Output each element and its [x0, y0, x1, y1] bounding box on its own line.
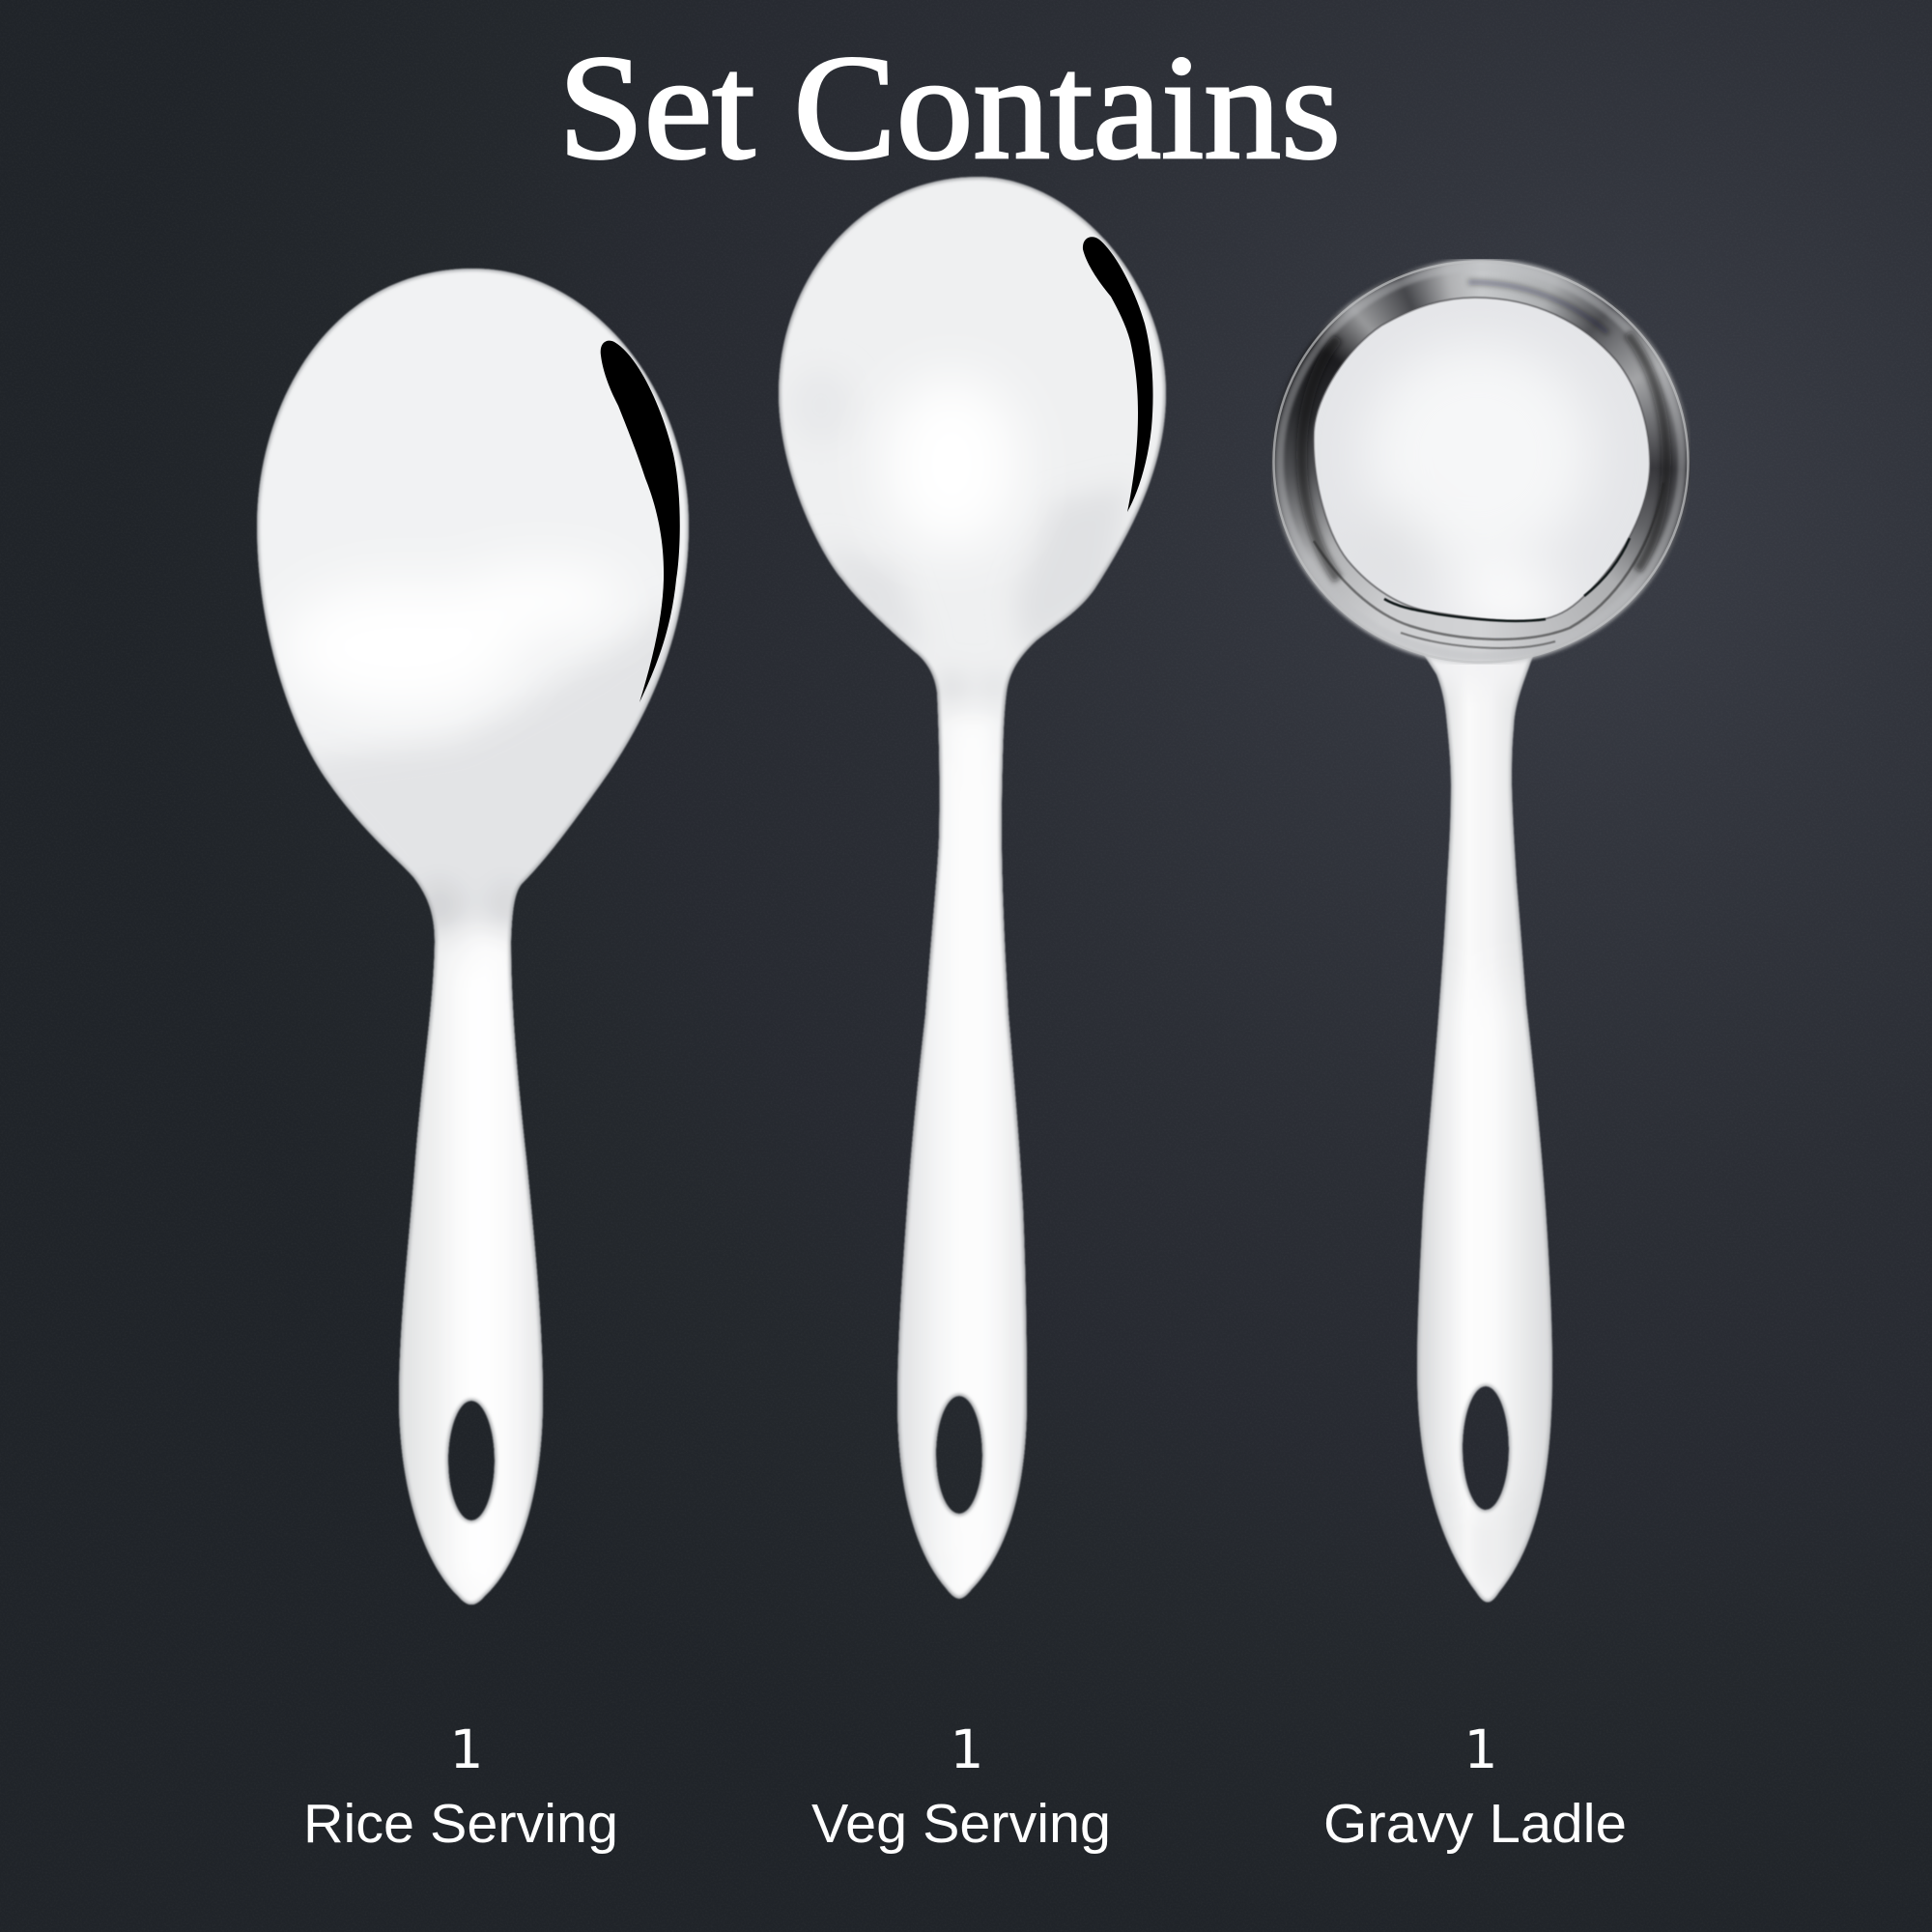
item label: veg serving	[811, 1719, 1111, 1855]
item label: gravy ladle	[1323, 1719, 1627, 1855]
ladle rim outer edge	[1273, 261, 1689, 663]
quantity: 1	[951, 1719, 983, 1780]
ladle rim outer band	[1280, 268, 1682, 656]
title: Set Contains	[558, 24, 1341, 190]
icon: veg serving spoon	[778, 176, 1167, 1600]
ladle handle	[1416, 656, 1553, 1604]
quantity: 1	[1464, 1719, 1497, 1780]
ladle rim reflection lines	[1314, 483, 1663, 648]
ladle bowl	[1304, 290, 1662, 630]
spoon bowl dark reflection	[601, 341, 680, 702]
item label: rice serving	[303, 1719, 618, 1855]
ladle rim	[1271, 259, 1690, 665]
spoon bowl dark reflection	[1083, 237, 1153, 512]
name: Gravy Ladle	[1323, 1793, 1627, 1855]
icon: rice serving spoon	[256, 268, 690, 1605]
quantity: 1	[450, 1719, 483, 1780]
ladle rim dark inner reflections	[1302, 282, 1666, 580]
name: Veg Serving	[811, 1793, 1111, 1855]
icon: gravy ladle	[1271, 259, 1690, 1613]
name: Rice Serving	[303, 1793, 618, 1855]
